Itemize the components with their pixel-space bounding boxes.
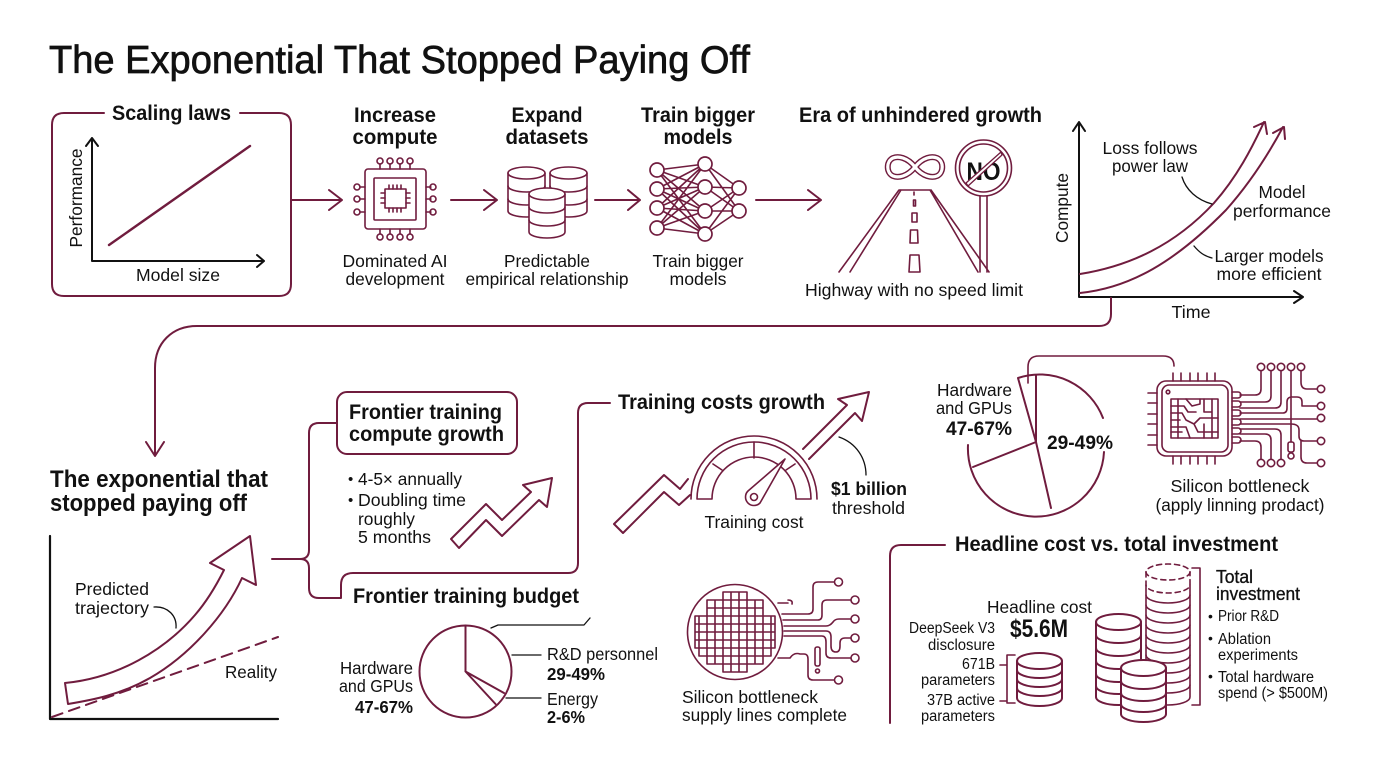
arrow: predicted trajectory	[65, 536, 256, 704]
bullet list: •	[348, 492, 353, 509]
caption: Highway with no speed limit	[805, 280, 1023, 300]
chart axes	[86, 138, 264, 267]
icon: tall stack	[1146, 564, 1190, 705]
bullet list: experiments	[1218, 647, 1298, 664]
x axis label: Model size	[136, 265, 220, 285]
panel: frontier training budget	[339, 584, 658, 727]
icon: front stack	[1121, 660, 1166, 722]
icon: database stacks	[508, 167, 587, 238]
bullet list: spend (> $500M)	[1218, 685, 1328, 702]
heading: Expand	[512, 103, 582, 127]
label: energy: Energy	[547, 689, 598, 709]
heading: Training costs growth	[618, 390, 825, 414]
label: and gpus: and GPUs	[936, 398, 1012, 418]
value: 29-49: 29-49%	[1047, 432, 1113, 454]
curve: lower	[1080, 127, 1285, 293]
small bracket	[1000, 655, 1015, 703]
bullet list: Prior R&D	[1218, 608, 1279, 625]
panel: silicon wafer	[682, 578, 859, 725]
panel: scaling laws	[52, 101, 291, 296]
chart axes	[50, 536, 278, 719]
caption: Silicon bottleneck	[682, 687, 818, 707]
icon: infinity	[888, 157, 942, 177]
bullet list: Ablation	[1218, 631, 1271, 648]
heading: Increase	[354, 103, 436, 127]
caption line 2: models	[670, 269, 727, 289]
label: loss follows: Loss follows	[1102, 138, 1198, 158]
connector	[1028, 356, 1174, 383]
bullet list: Doubling time	[358, 490, 466, 510]
icon: neural network	[650, 157, 746, 241]
arrow: scaling laws to compute	[291, 190, 342, 210]
arrow: connector to lower row	[146, 298, 1111, 456]
heading: scaling laws: Scaling laws	[112, 101, 231, 125]
y axis label: Performance	[66, 148, 86, 248]
y axis label: Compute	[1052, 173, 1072, 243]
label: threshold: threshold	[832, 498, 905, 518]
heading: Headline cost vs. total investment	[955, 532, 1278, 556]
label: parameters: parameters	[921, 672, 995, 689]
x axis label: Time	[1172, 302, 1210, 322]
arrow: models to era	[756, 190, 821, 210]
label: disclosure: disclosure	[928, 637, 995, 654]
heading line 2: datasets	[506, 125, 589, 149]
label: training cost: Training cost	[704, 512, 804, 532]
bullet list: roughly	[358, 509, 415, 529]
section: the exponential that stopped paying off	[50, 466, 278, 719]
chart line	[109, 146, 250, 245]
label: trajectory: trajectory	[75, 598, 149, 618]
label: predicted: Predicted	[75, 579, 149, 599]
heading line 2: models	[664, 125, 733, 149]
icon: small stack	[1017, 653, 1062, 706]
label: and gpus: and GPUs	[339, 676, 413, 696]
curve: upper	[1080, 122, 1267, 274]
icon: rising arrow right part	[803, 392, 869, 459]
icon: no sign: NO	[966, 158, 1000, 186]
label: rd personnel: R&D personnel	[547, 644, 658, 664]
value: 1 billion: $1 billion	[831, 479, 907, 499]
value: 47-67: 47-67%	[946, 418, 1012, 440]
label: larger models: Larger models	[1214, 246, 1324, 266]
label: model performance: Model	[1258, 182, 1306, 202]
icon: wafer traces	[778, 578, 859, 684]
caption line 2: development	[346, 269, 445, 289]
icon: silicon chip	[1148, 363, 1325, 467]
heading: Frontier training budget	[353, 584, 579, 608]
value: 29-49: 29-49%	[547, 664, 605, 684]
connector: brace to frontier items	[272, 403, 610, 598]
label: deepseek: DeepSeek V3	[909, 620, 995, 637]
icon: rising arrow left part	[614, 475, 690, 533]
bullet list	[1208, 608, 1328, 702]
step: train bigger models	[641, 103, 756, 289]
leader: threshold	[839, 437, 866, 475]
caption line 2: (apply linning prodact)	[1156, 495, 1324, 515]
icon: highway	[839, 190, 989, 272]
label: 37B active: 37B active	[927, 692, 995, 709]
leader: loss follows	[1182, 177, 1212, 204]
heading: Frontier training	[349, 400, 502, 424]
leaders	[491, 618, 590, 698]
step: increase compute	[342, 103, 448, 289]
bracket	[890, 545, 945, 723]
value: 5.6M: $5.6M	[1010, 615, 1068, 643]
label line 2: performance	[1233, 201, 1331, 221]
icon: infinity inner	[888, 157, 942, 177]
icon: left stack	[1096, 614, 1141, 705]
heading line 2: stopped paying off	[50, 490, 248, 517]
label: 671B: 671B	[962, 656, 995, 673]
heading: Era of unhindered growth	[799, 103, 1042, 127]
heading: Train bigger	[641, 103, 756, 127]
label: headline cost: Headline cost	[987, 597, 1092, 617]
caption: Silicon bottleneck	[1170, 476, 1310, 496]
label line 2: power law	[1112, 156, 1188, 176]
panel: headline cost vs total investment	[890, 532, 1328, 725]
chart: compute vs time	[1052, 122, 1331, 322]
leader: predicted	[154, 607, 176, 628]
value: 2-6: 2-6%	[547, 707, 585, 727]
label: investment: investment	[1216, 583, 1300, 604]
box	[337, 392, 517, 454]
panel: era of unhindered growth	[799, 103, 1042, 300]
bullet list: •	[348, 471, 353, 488]
panel: training costs growth	[614, 390, 907, 533]
right bracket	[1192, 568, 1200, 705]
caption line 2: empirical relationship	[466, 269, 628, 289]
bullet list: •	[1208, 630, 1213, 646]
caption: Dominated AI	[342, 251, 448, 271]
bullet list: •	[1208, 608, 1213, 624]
title: The Exponential That Stopped Paying Off	[49, 39, 750, 82]
leader: larger models	[1194, 246, 1212, 258]
label: total: Total	[1216, 566, 1253, 587]
heading: The exponential that	[50, 466, 268, 493]
value: 47-67: 47-67%	[355, 697, 413, 717]
icon: zigzag arrow	[451, 478, 552, 548]
caption line 2: supply lines complete	[682, 705, 847, 725]
bullet list: Total hardware	[1218, 669, 1314, 686]
line: reality dashed	[52, 637, 278, 717]
arrow: datasets to models	[595, 190, 640, 210]
bullet list	[348, 469, 466, 547]
caption: Predictable	[504, 251, 590, 271]
heading line 2: compute growth	[349, 422, 504, 446]
icon: no sign	[956, 140, 1012, 272]
bullet list: 4-5× annually	[358, 469, 462, 489]
heading line 2: compute	[352, 125, 438, 149]
arrow: compute to datasets	[451, 190, 497, 210]
panel: frontier training compute growth	[337, 392, 552, 548]
panel: hardware pie and chip	[936, 356, 1325, 517]
pie chart	[968, 374, 1104, 517]
icon: chip	[354, 158, 436, 240]
label line 2: more efficient	[1216, 264, 1322, 284]
caption: Train bigger	[652, 251, 744, 271]
label: parameters 2: parameters	[921, 708, 995, 725]
icon: wafer	[688, 584, 782, 680]
label: hardware: Hardware	[937, 380, 1012, 400]
bullet list: 5 months	[358, 527, 431, 547]
pie chart	[420, 626, 512, 718]
label: reality: Reality	[225, 662, 277, 682]
icon: gauge	[691, 436, 817, 505]
bullet list: •	[1208, 668, 1213, 684]
step: expand datasets	[466, 103, 628, 289]
label: hardware: Hardware	[340, 658, 413, 678]
